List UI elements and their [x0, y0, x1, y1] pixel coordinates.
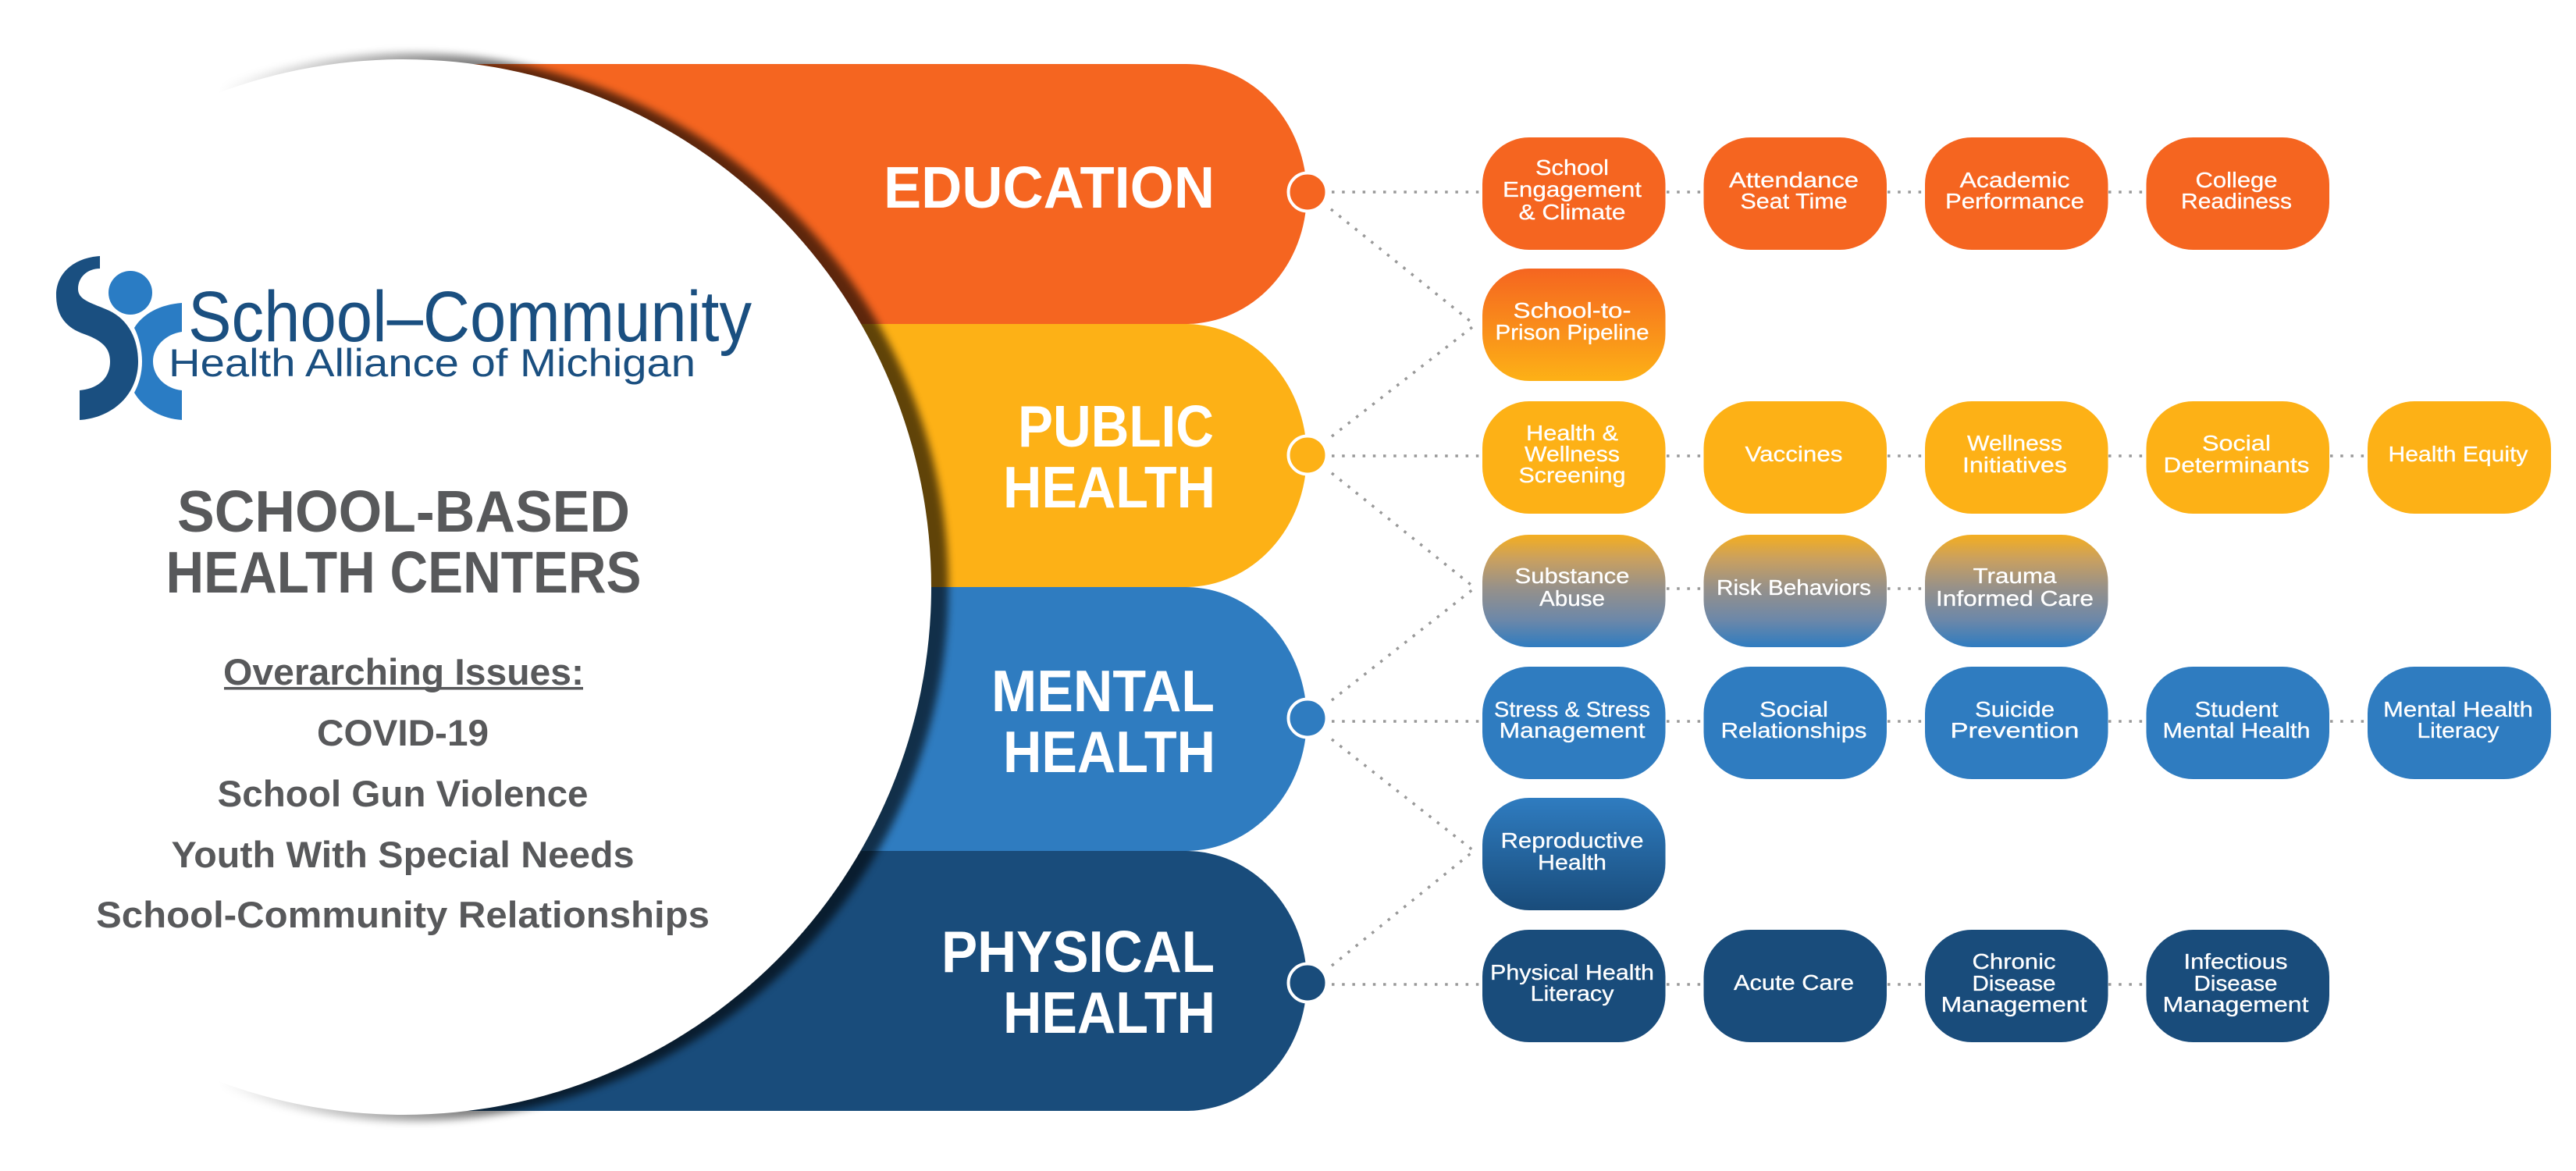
chip: chronic disease management: Disease	[1972, 971, 2056, 995]
chip: social determinants: Determinants	[2164, 453, 2309, 477]
chip: substance abuse: Substance	[1514, 564, 1630, 588]
chip: academic performance	[1925, 137, 2108, 250]
chip: physical health literacy: Literacy	[1530, 981, 1614, 1005]
text block: overarching issues: School Gun Violence	[217, 773, 589, 814]
band: education	[406, 64, 1307, 324]
chip: academic performance: Performance	[1945, 189, 2084, 213]
label: public health: PUBLIC	[1018, 393, 1214, 459]
node: public health	[1288, 436, 1327, 475]
chips row: education	[1482, 137, 2329, 250]
logo: School-Community Health Alliance of Michigan: Health Alliance of Michigan	[169, 341, 696, 385]
label: public health: HEALTH	[1003, 454, 1215, 520]
chip: suicide prevention: Prevention	[1950, 718, 2080, 742]
chip: physical health literacy	[1482, 930, 1666, 1042]
label: physical health: HEALTH	[1003, 980, 1215, 1045]
chip: school engagement and climate: Engagement	[1503, 177, 1642, 201]
chip: college readiness	[2147, 137, 2329, 250]
chips row: public health	[1482, 401, 2551, 514]
chips row: mental health	[1482, 667, 2551, 779]
chip: physical health literacy: Physical Health	[1490, 960, 1654, 984]
node: education	[1288, 173, 1327, 211]
chip: social determinants: Social	[2202, 431, 2271, 455]
label: mental health	[991, 658, 1215, 785]
chip: attendance seat time: Attendance	[1729, 168, 1859, 192]
chip: health equity	[2368, 401, 2551, 514]
chip: mental health literacy	[2368, 667, 2551, 779]
chip: health and wellness screening	[1482, 401, 1666, 514]
chip: health and wellness screening: Wellness	[1525, 442, 1620, 466]
text block: overarching issues: Youth With Special Needs	[172, 834, 634, 875]
chip: infectious disease management	[2147, 930, 2329, 1042]
label: mental health: MENTAL	[991, 658, 1215, 724]
text block: overarching issues	[96, 651, 710, 935]
node: physical health	[1288, 963, 1327, 1002]
label: education: EDUCATION	[884, 155, 1215, 220]
chip: acute care: Acute Care	[1734, 970, 1854, 995]
chip: infectious disease management: Management	[2162, 992, 2309, 1016]
chip: trauma informed care: Informed Care	[1936, 586, 2094, 610]
chip: college readiness: College	[2195, 168, 2278, 192]
chip: social relationships: Relationships	[1720, 718, 1867, 742]
chip: vaccines: Vaccines	[1745, 442, 1842, 466]
chip: attendance seat time: Seat Time	[1741, 189, 1847, 213]
chip: college readiness: Readiness	[2181, 189, 2292, 213]
connectors: dotted lines	[1331, 192, 2368, 984]
chip: reproductive health: Reproductive	[1500, 828, 1644, 852]
chip: risk behaviors	[1703, 535, 1887, 647]
text block: overarching issues: School-Community Relationships	[96, 894, 710, 935]
heading: school-based health centers	[165, 479, 642, 605]
heading: school-based health centers: HEALTH CENTERS	[165, 539, 642, 605]
band: mental health	[406, 587, 1307, 851]
chip: attendance seat time	[1703, 137, 1887, 250]
chip: wellness initiatives: Wellness	[1967, 431, 2062, 455]
chip: stress and stress management: Stress & Stress	[1494, 697, 1650, 721]
chip: student mental health	[2147, 667, 2329, 779]
chip: health and wellness screening: Screening	[1519, 463, 1625, 487]
chip: suicide prevention	[1925, 667, 2108, 779]
chip: social relationships	[1703, 667, 1887, 779]
chip: chronic disease management: Chronic	[1972, 949, 2056, 973]
chip: school engagement and climate: School	[1535, 155, 1609, 180]
chip: stress and stress management: Management	[1499, 718, 1646, 742]
chip: school engagement and climate: & Climate	[1519, 200, 1625, 224]
chip: academic performance: Academic	[1959, 168, 2070, 192]
chip: vaccines	[1703, 401, 1887, 514]
text block: overarching issues: COVID-19	[317, 712, 489, 753]
chip: wellness initiatives: Initiatives	[1962, 453, 2067, 477]
chip: infectious disease management: Disease	[2194, 971, 2278, 995]
chip: stress and stress management	[1482, 667, 1666, 779]
chip: reproductive health	[1482, 798, 1666, 910]
label: physical health: PHYSICAL	[941, 919, 1215, 984]
chip: health equity: Health Equity	[2389, 442, 2528, 466]
node: mental health	[1288, 699, 1327, 737]
chips row: physical health	[1482, 930, 2329, 1042]
chip: substance abuse	[1482, 535, 1666, 647]
chip: reproductive health: Health	[1538, 850, 1606, 874]
chip: mental health literacy: Literacy	[2417, 718, 2500, 742]
logo: School-Community Health Alliance of Michigan: School–Community	[188, 277, 752, 357]
logo: School-Community Health Alliance of Michigan	[56, 256, 752, 420]
chip: acute care	[1703, 930, 1887, 1042]
chip: school engagement and climate	[1482, 137, 1666, 250]
chip: trauma informed care	[1925, 535, 2108, 647]
chip: chronic disease management: Management	[1941, 992, 2087, 1016]
chip: school-to-prison pipeline	[1482, 269, 1666, 381]
label: physical health	[941, 919, 1215, 1045]
chip: student mental health: Student	[2195, 697, 2279, 721]
circle shadow	[237, 48, 954, 1126]
chip: suicide prevention: Suicide	[1975, 697, 2055, 721]
chip: trauma informed care: Trauma	[1973, 564, 2057, 588]
chip: chronic disease management	[1925, 930, 2108, 1042]
chips row: public-mental overlap	[1482, 535, 2108, 647]
chip: school-to-prison pipeline: School-to-	[1513, 298, 1631, 322]
chip: substance abuse: Abuse	[1539, 586, 1605, 610]
band: public health	[406, 324, 1307, 587]
chip: social relationships: Social	[1759, 697, 1828, 721]
label: public health	[1003, 393, 1215, 520]
chip: social determinants	[2147, 401, 2329, 514]
chip: infectious disease management: Infectious	[2184, 949, 2287, 973]
heading: school-based health centers: SCHOOL-BASED	[177, 479, 630, 544]
chip: health and wellness screening: Health &	[1526, 421, 1618, 445]
chip: wellness initiatives	[1925, 401, 2108, 514]
white circle panel	[0, 59, 931, 1115]
chip: school-to-prison pipeline: Prison Pipeline	[1496, 320, 1649, 344]
label: mental health: HEALTH	[1003, 719, 1215, 785]
chip: student mental health: Mental Health	[2162, 718, 2311, 742]
chip: risk behaviors: Risk Behaviors	[1717, 575, 1871, 600]
chip: mental health literacy: Mental Health	[2383, 697, 2533, 721]
band: physical health	[406, 851, 1307, 1111]
text block: overarching issues: Overarching Issues:	[223, 651, 584, 692]
